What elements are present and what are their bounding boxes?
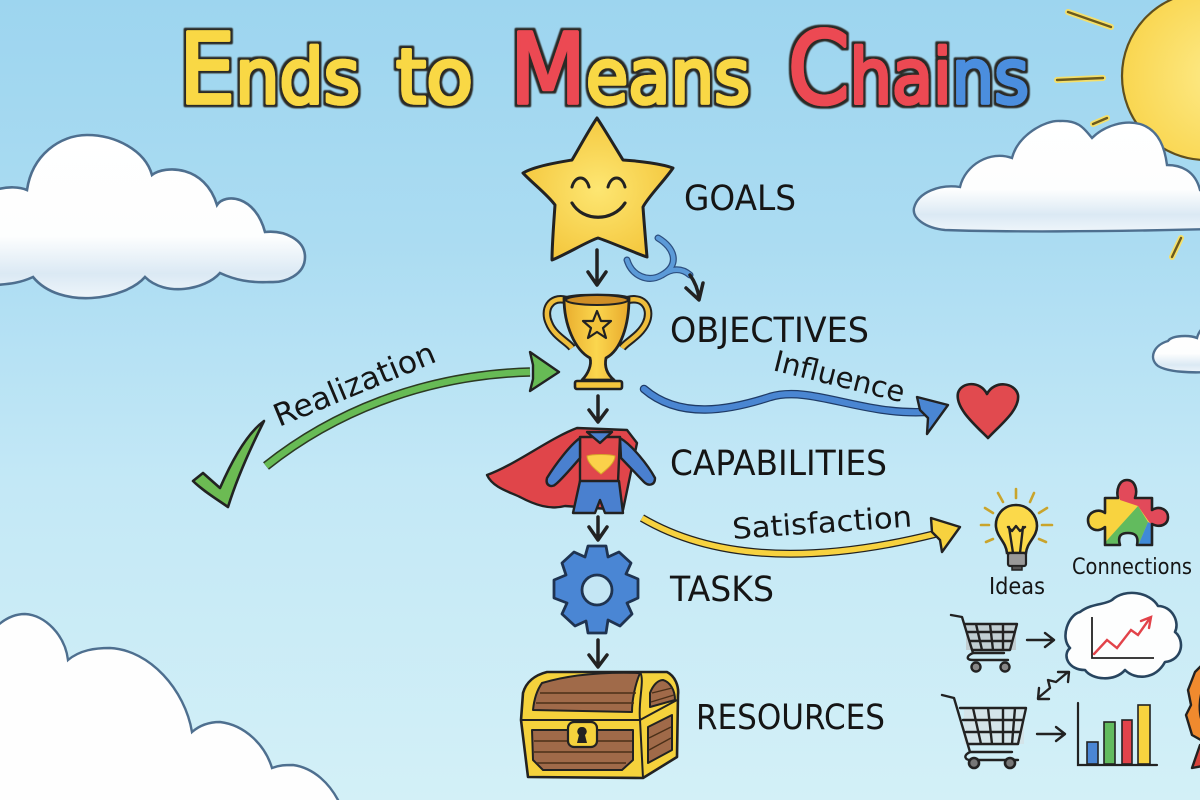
- icon: treasure chest: [521, 672, 678, 778]
- text: GOALS: GOALS: [684, 179, 796, 219]
- arrow: curly blue to objectives: [627, 238, 703, 300]
- arrow: double headed zigzag: [1038, 672, 1069, 699]
- arrow: bottom cart to bar chart: [1037, 727, 1065, 741]
- title: [179, 10, 1029, 127]
- arrow: satisfaction yellow: [642, 518, 960, 554]
- title: Chains: [788, 10, 1029, 127]
- text: Influence: Influence: [770, 344, 909, 409]
- title: to: [396, 32, 473, 121]
- text: OBJECTIVES: OBJECTIVES: [670, 311, 869, 351]
- cloud: small right: [1153, 323, 1200, 372]
- cloud: bottom left: [0, 614, 338, 800]
- cloud: top left: [0, 135, 305, 298]
- icon: cloud with rising line chart: [1065, 593, 1181, 678]
- icon: sun: [1057, 0, 1200, 257]
- icon: shopping cart bottom: [942, 695, 1026, 768]
- cloud: top right: [914, 121, 1200, 231]
- arrow: tasks to resources: [589, 640, 607, 667]
- bar chart: [1078, 703, 1157, 765]
- title: Means: [510, 13, 750, 126]
- arrow: objectives to capabilities: [589, 396, 607, 422]
- arrow: top cart to cloud: [1027, 633, 1054, 647]
- text: Satisfaction: Satisfaction: [731, 500, 913, 546]
- icon: check mark: [193, 421, 264, 507]
- icon: light bulb: [981, 489, 1052, 570]
- icon: trophy: [547, 295, 648, 389]
- arrow: realization green: [266, 352, 559, 466]
- icon: smiling star: [523, 118, 673, 260]
- title: Ends: [179, 13, 360, 126]
- icon: superhero costume: [487, 428, 655, 513]
- text: Ideas: Ideas: [989, 574, 1045, 600]
- text: Realization: Realization: [268, 335, 441, 434]
- icon: shopping cart top: [951, 615, 1017, 672]
- text: TASKS: TASKS: [669, 570, 774, 610]
- arrow: capabilities to tasks: [589, 517, 607, 540]
- arrow: influence blue: [644, 389, 948, 434]
- icon: award badge partial: [1186, 662, 1200, 768]
- icon: puzzle: [1086, 478, 1170, 546]
- icon: heart: [958, 384, 1018, 438]
- text: RESOURCES: RESOURCES: [696, 698, 885, 738]
- icon: gear: [554, 546, 638, 633]
- text: CAPABILITIES: CAPABILITIES: [670, 444, 887, 484]
- arrow: goals to objectives: [588, 250, 606, 285]
